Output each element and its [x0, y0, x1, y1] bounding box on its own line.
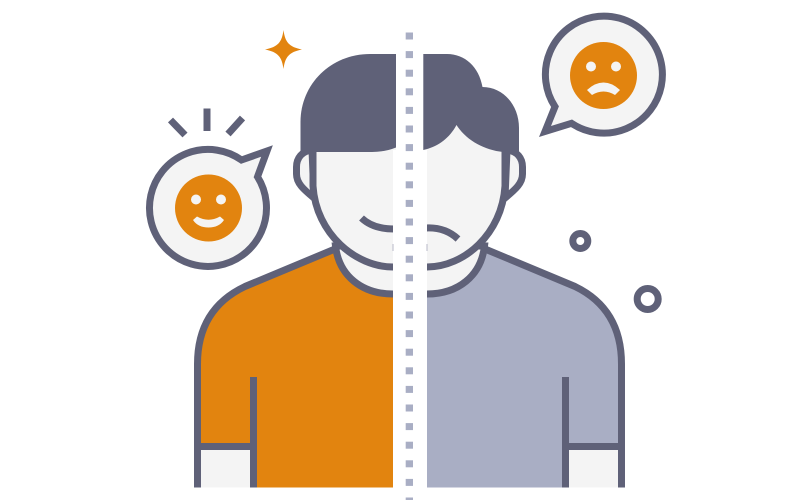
hair: left side	[300, 54, 396, 152]
central divider	[392, 30, 428, 500]
right ear	[505, 150, 522, 198]
speech bubble: sad	[545, 16, 662, 133]
icon: rays above happy bubble	[170, 108, 242, 135]
speech bubble: happy	[149, 149, 267, 266]
icon: orange sparkle	[265, 30, 302, 69]
icon: smiley face	[175, 174, 242, 242]
icon: large ring	[637, 288, 658, 310]
icon: small ring	[573, 234, 588, 248]
left half: orange shirt	[198, 240, 400, 488]
face	[313, 120, 505, 267]
left ear	[296, 150, 314, 198]
hair: right side	[423, 54, 519, 152]
neck	[336, 246, 484, 294]
icon: sad face	[570, 42, 637, 109]
right half: grey-blue shirt	[420, 240, 622, 488]
mouth: half smile and half frown	[362, 218, 458, 239]
